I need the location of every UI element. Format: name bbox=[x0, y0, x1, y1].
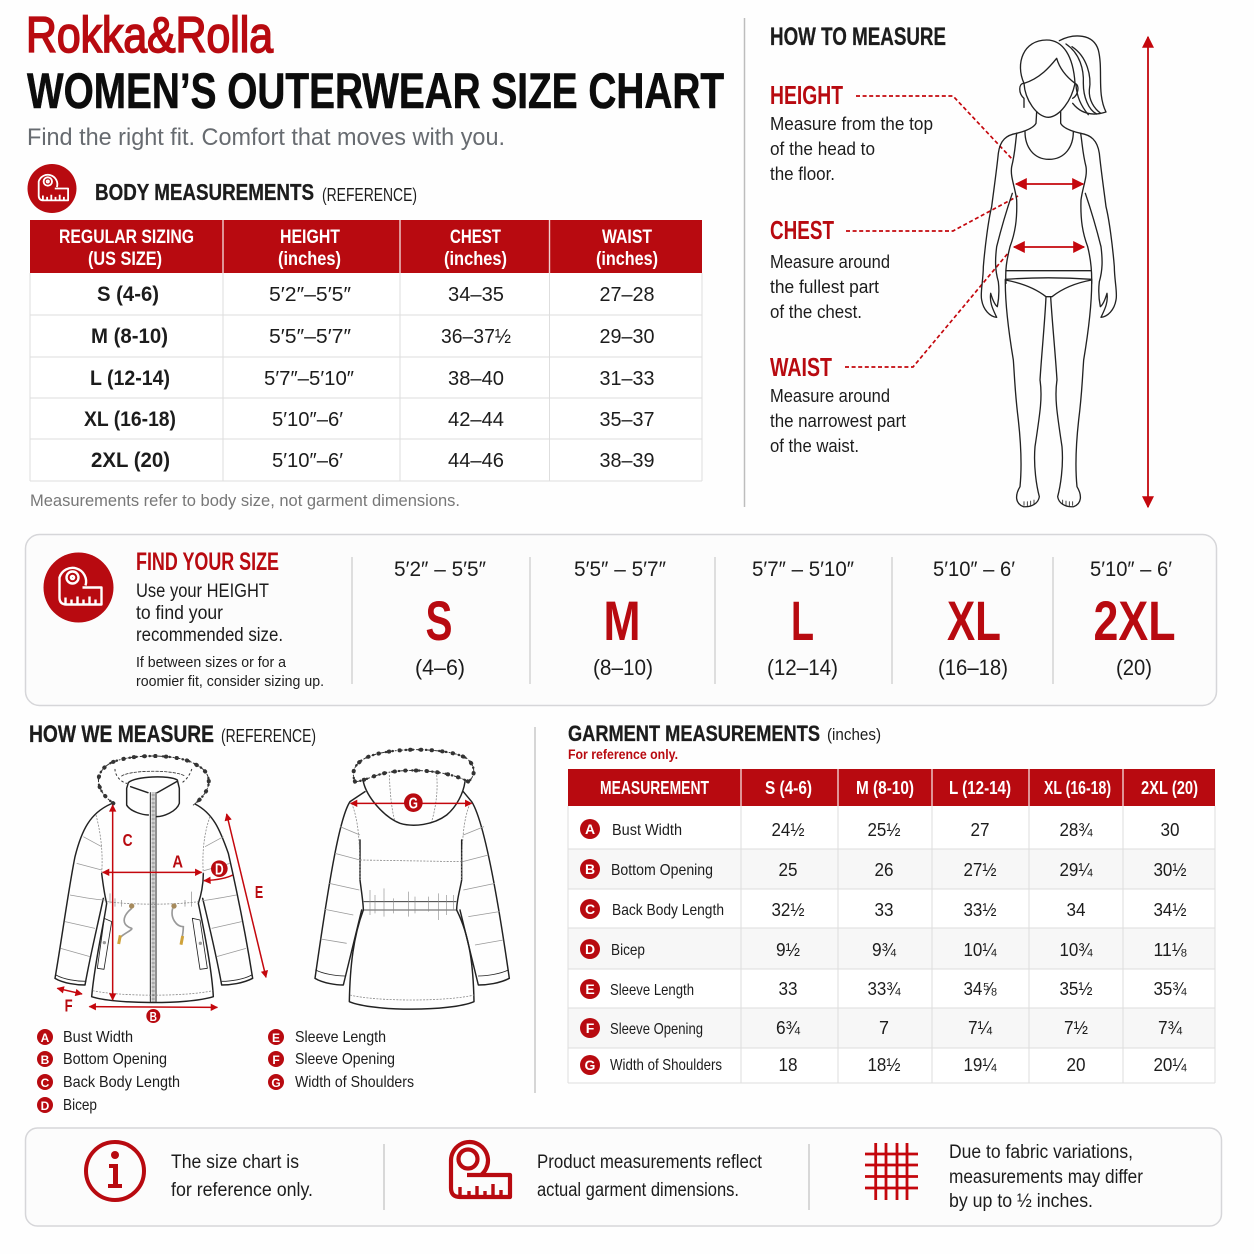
body figure bbox=[981, 36, 1116, 507]
row: 2XL: 38–39 bbox=[600, 450, 654, 472]
row D: D bbox=[585, 941, 595, 957]
row: S: 27–28 bbox=[600, 284, 654, 306]
row G: G bbox=[585, 1057, 596, 1073]
legend item C: C bbox=[41, 1076, 50, 1090]
icon: info bbox=[86, 1142, 144, 1200]
row C: 34 bbox=[1066, 899, 1086, 920]
row A bbox=[580, 819, 1180, 840]
row: L bbox=[90, 367, 654, 390]
row: S: 5′2″–5′5″ bbox=[269, 284, 351, 306]
note: reference only: for reference only. bbox=[171, 1180, 313, 1201]
size: 2XL bbox=[1090, 558, 1176, 680]
table: body measurements bbox=[30, 220, 702, 481]
legend item A: Bust Width bbox=[63, 1029, 133, 1046]
size: S bbox=[394, 558, 487, 680]
row: M: 36–37½ bbox=[441, 326, 511, 348]
row: 2XL: 2XL (20) bbox=[91, 449, 170, 472]
row G: 20 bbox=[1066, 1054, 1086, 1075]
table header: S (4-6) bbox=[765, 778, 812, 798]
callout: height: of the head to bbox=[770, 139, 875, 159]
row: S: S (4-6) bbox=[97, 283, 159, 306]
legend item A: A bbox=[41, 1031, 50, 1045]
heading and instructions: FIND YOUR SIZE bbox=[136, 548, 279, 576]
table header: REGULAR SIZING bbox=[59, 227, 194, 248]
size: XL: XL bbox=[947, 589, 1001, 652]
row C: 34½ bbox=[1154, 899, 1186, 920]
row E: E bbox=[585, 981, 595, 997]
table header: M (8-10) bbox=[856, 778, 914, 798]
heading and instructions: Use your HEIGHT bbox=[136, 581, 269, 602]
table header: MEASUREMENT bbox=[600, 778, 709, 798]
row F: 7½ bbox=[1064, 1017, 1088, 1038]
row D: 9¾ bbox=[872, 939, 897, 960]
row D: 11⅛ bbox=[1154, 939, 1187, 960]
table header: (inches) bbox=[444, 249, 507, 270]
row B: 25 bbox=[778, 859, 798, 880]
icon: fabric grid bbox=[865, 1143, 918, 1200]
heading: how we measure: HOW WE MEASURE bbox=[29, 721, 214, 748]
callout: chest: of the chest. bbox=[770, 302, 862, 322]
heading and instructions: recommended size. bbox=[136, 625, 283, 646]
row G: Width of Shoulders bbox=[610, 1057, 722, 1074]
callout: chest bbox=[770, 196, 1018, 322]
row D: 9½ bbox=[776, 939, 800, 960]
row: XL bbox=[84, 408, 654, 431]
heading: garment measurements: GARMENT MEASUREMENTS bbox=[568, 721, 820, 746]
icon: tape measure bbox=[451, 1142, 510, 1197]
row E: 35½ bbox=[1060, 978, 1092, 999]
legend item D: D bbox=[41, 1099, 50, 1113]
measurement letters: E bbox=[255, 882, 263, 902]
panel: footer notes bbox=[26, 1128, 1222, 1226]
heading: how to measure: HOW TO MEASURE bbox=[770, 23, 946, 51]
left arm and torso bbox=[981, 133, 1017, 317]
title: WOMEN’S OUTERWEAR SIZE CHART bbox=[27, 63, 724, 119]
size: S: 5′2″ – 5′5″ bbox=[394, 558, 487, 581]
row D: 10¼ bbox=[964, 939, 997, 960]
callout: chest: Measure around bbox=[770, 252, 890, 272]
row: S bbox=[97, 283, 654, 306]
row: M bbox=[91, 325, 654, 348]
legend bbox=[37, 1029, 414, 1114]
row F: 7¼ bbox=[968, 1017, 993, 1038]
heading: body measurements: BODY MEASUREMENTS bbox=[95, 179, 314, 205]
heading and instructions: roomier fit, consider sizing up. bbox=[136, 673, 324, 690]
table: garment measurements bbox=[568, 769, 1215, 1083]
row E: 34⅝ bbox=[964, 978, 997, 999]
row D: Bicep bbox=[611, 942, 645, 959]
row: XL: 42–44 bbox=[448, 409, 504, 431]
measurement letters: F bbox=[65, 995, 73, 1015]
row: L: L (12-14) bbox=[90, 367, 170, 390]
row: M: M (8-10) bbox=[91, 325, 168, 348]
legend item F: F bbox=[272, 1053, 280, 1067]
row D bbox=[580, 939, 1187, 960]
row E: 35¾ bbox=[1154, 978, 1187, 999]
size: S: (4–6) bbox=[415, 655, 465, 680]
row: M: 5′5″–5′7″ bbox=[269, 326, 351, 348]
table header: (inches) bbox=[596, 249, 658, 270]
table header: L (12-14) bbox=[949, 778, 1011, 798]
left leg bbox=[1005, 280, 1046, 507]
note: garment dimensions bbox=[537, 1152, 763, 1201]
tagline: Find the right fit. Comfort that moves with you. bbox=[27, 124, 505, 151]
fur hood trim bbox=[353, 750, 474, 782]
row C bbox=[580, 899, 1186, 920]
row F: 7¾ bbox=[1158, 1017, 1183, 1038]
heading: how we measure: (REFERENCE) bbox=[221, 726, 316, 746]
size: XL bbox=[933, 558, 1015, 680]
callout: height bbox=[770, 80, 1013, 184]
icon: tape measure bbox=[44, 552, 114, 622]
arrow: chest bbox=[1016, 183, 1083, 185]
callout: chest: the fullest part bbox=[770, 277, 879, 297]
row G bbox=[580, 1054, 1187, 1075]
note: fabric variation: measurements may differ bbox=[949, 1167, 1144, 1188]
callout: waist bbox=[770, 252, 1009, 456]
callout: chest: CHEST bbox=[770, 215, 834, 245]
row F: F bbox=[586, 1020, 595, 1036]
table header: (US SIZE) bbox=[88, 249, 162, 270]
row F: 7 bbox=[879, 1017, 889, 1038]
row E: 33 bbox=[778, 978, 798, 999]
row G: 20¼ bbox=[1154, 1054, 1187, 1075]
row B: B bbox=[585, 861, 595, 877]
legend item C: Back Body Length bbox=[63, 1074, 180, 1091]
heading and instructions bbox=[136, 548, 324, 690]
row: S: 34–35 bbox=[448, 284, 504, 306]
drawcords and toggles bbox=[103, 903, 202, 945]
callout: height: HEIGHT bbox=[770, 80, 843, 110]
table header: XL (16-18) bbox=[1044, 778, 1111, 798]
row B bbox=[580, 859, 1186, 880]
heading: body measurements: (REFERENCE) bbox=[322, 185, 417, 205]
row: L: 31–33 bbox=[600, 368, 654, 390]
row E: 33¾ bbox=[868, 978, 901, 999]
size: L: L bbox=[791, 589, 814, 652]
panel: find your size bbox=[26, 534, 1216, 706]
row: L: 38–40 bbox=[448, 368, 504, 390]
heading and instructions: If between sizes or for a bbox=[136, 654, 287, 671]
row B: 30½ bbox=[1154, 859, 1186, 880]
row: 2XL: 5′10″–6′ bbox=[272, 450, 343, 472]
callout: height: Measure from the top bbox=[770, 114, 933, 134]
row G: 18 bbox=[778, 1054, 798, 1075]
table header bbox=[30, 220, 702, 273]
measurement letters: C bbox=[123, 830, 133, 850]
size: 2XL: 5′10″ – 6′ bbox=[1090, 558, 1172, 581]
row A: 25½ bbox=[868, 819, 900, 840]
jacket back diagram bbox=[315, 750, 509, 1009]
row A: 27 bbox=[970, 819, 990, 840]
legend item F: Sleeve Opening bbox=[295, 1051, 395, 1068]
note: reference only: The size chart is bbox=[171, 1152, 299, 1173]
footnote: Measurements refer to body size, not garment dimensions. bbox=[30, 491, 460, 510]
measurement arrow and badge bbox=[351, 793, 472, 812]
brand name: Rokka&Rolla bbox=[26, 7, 273, 63]
legend item D: Bicep bbox=[63, 1097, 97, 1114]
measurement arrow and badge: G bbox=[409, 795, 418, 812]
legend item G: G bbox=[271, 1076, 281, 1090]
heading and instructions: to find your bbox=[136, 603, 224, 624]
legend item B: B bbox=[41, 1053, 50, 1067]
size: S: S bbox=[426, 589, 452, 652]
size: M: 5′5″ – 5′7″ bbox=[574, 558, 667, 581]
row C: C bbox=[585, 901, 595, 917]
heading: garment measurements: For reference only. bbox=[568, 746, 678, 762]
legend item E: Sleeve Length bbox=[295, 1029, 386, 1046]
measurement letters: A bbox=[172, 851, 183, 871]
row: XL: 35–37 bbox=[600, 409, 654, 431]
table header bbox=[568, 769, 1215, 806]
callout: waist: the narrowest part bbox=[770, 411, 906, 431]
size: XL: 5′10″ – 6′ bbox=[933, 558, 1015, 581]
row: M: 29–30 bbox=[600, 326, 654, 348]
legend item G: Width of Shoulders bbox=[295, 1074, 414, 1091]
jacket front diagram bbox=[55, 756, 266, 1024]
size: L bbox=[752, 558, 855, 680]
callout: waist: WAIST bbox=[770, 352, 832, 382]
measurement letters: B bbox=[150, 1009, 157, 1024]
row F: 6¾ bbox=[776, 1017, 801, 1038]
row E: Sleeve Length bbox=[610, 982, 694, 999]
row G: 19¼ bbox=[964, 1054, 997, 1075]
size: L: 5′7″ – 5′10″ bbox=[752, 558, 855, 581]
row: XL: 5′10″–6′ bbox=[272, 409, 343, 431]
note: fabric variation: by up to ½ inches. bbox=[949, 1191, 1093, 1212]
heading: garment measurements bbox=[568, 721, 881, 762]
size: XL: (16–18) bbox=[938, 655, 1008, 680]
note: fabric variation: Due to fabric variations, bbox=[949, 1142, 1133, 1163]
row A: A bbox=[585, 821, 595, 837]
table header: (inches) bbox=[278, 249, 341, 270]
row B: 27½ bbox=[964, 859, 996, 880]
table header: CHEST bbox=[450, 227, 501, 248]
legend item A bbox=[37, 1029, 133, 1046]
row B: 26 bbox=[874, 859, 894, 880]
size: L: (12–14) bbox=[767, 655, 838, 680]
table header: WAIST bbox=[602, 227, 652, 248]
row B: Bottom Opening bbox=[611, 862, 713, 879]
row G: 18½ bbox=[868, 1054, 900, 1075]
row E bbox=[580, 978, 1187, 999]
size: M: M bbox=[604, 589, 640, 652]
row A: 30 bbox=[1160, 819, 1180, 840]
measurement letters bbox=[65, 830, 263, 1024]
row C: 33½ bbox=[964, 899, 996, 920]
note: reference only bbox=[171, 1152, 313, 1201]
legend item D bbox=[37, 1097, 97, 1114]
size: 2XL: (20) bbox=[1116, 655, 1152, 680]
callout: waist: of the waist. bbox=[770, 436, 859, 456]
row C: Back Body Length bbox=[612, 902, 724, 919]
right leg bbox=[1051, 280, 1092, 507]
arrow: waist bbox=[1014, 246, 1084, 248]
callout: waist: Measure around bbox=[770, 386, 890, 406]
row A: Bust Width bbox=[612, 822, 682, 839]
row A: 28¾ bbox=[1060, 819, 1093, 840]
note: fabric variation bbox=[949, 1142, 1144, 1212]
measurement arrows bbox=[57, 805, 266, 1007]
note: garment dimensions: actual garment dimensions. bbox=[537, 1180, 739, 1201]
row B: 29¼ bbox=[1060, 859, 1093, 880]
note: garment dimensions: Product measurements reflect bbox=[537, 1152, 763, 1173]
row D: 10¾ bbox=[1060, 939, 1093, 960]
row: 2XL bbox=[91, 449, 654, 472]
row C: 32½ bbox=[772, 899, 804, 920]
size: M: (8–10) bbox=[593, 655, 653, 680]
row A: 24½ bbox=[772, 819, 804, 840]
heading: garment measurements: (inches) bbox=[827, 725, 881, 744]
size: 2XL: 2XL bbox=[1094, 589, 1176, 652]
legend item E: E bbox=[272, 1031, 280, 1045]
size: M bbox=[574, 558, 667, 680]
row: 2XL: 44–46 bbox=[448, 450, 504, 472]
row C: 33 bbox=[874, 899, 894, 920]
table header: HEIGHT bbox=[280, 227, 340, 248]
row: L: 5′7″–5′10″ bbox=[264, 368, 354, 390]
fur hood trim bbox=[98, 756, 209, 805]
legend item B: Bottom Opening bbox=[63, 1051, 167, 1068]
row F bbox=[580, 1017, 1183, 1038]
row: XL: XL (16-18) bbox=[84, 408, 176, 431]
table header: 2XL (20) bbox=[1141, 778, 1198, 798]
icon: tape measure badge bbox=[28, 164, 76, 213]
measurement letters: D bbox=[215, 861, 224, 878]
arrow: height bbox=[1147, 37, 1149, 507]
callout: height: the floor. bbox=[770, 164, 835, 184]
right arm and torso bbox=[1081, 133, 1116, 317]
row F: Sleeve Opening bbox=[610, 1021, 703, 1038]
